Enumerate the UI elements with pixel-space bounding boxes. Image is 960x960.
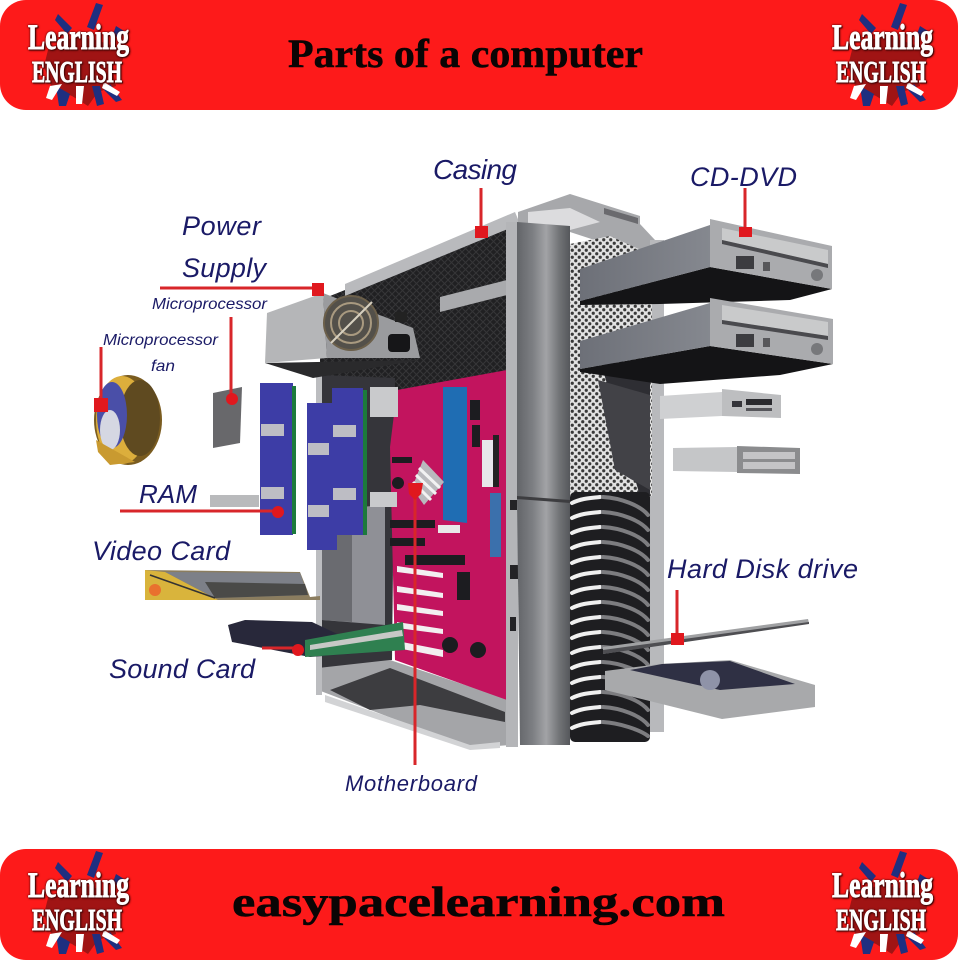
label: fan: fan <box>151 358 175 375</box>
interior drive bay wall <box>322 375 395 670</box>
floppy bay <box>673 446 800 474</box>
logo: bottom right <box>832 851 933 954</box>
motherboard <box>390 370 507 700</box>
sound card <box>228 620 405 657</box>
microprocessor fan <box>94 375 162 465</box>
casing top rail <box>345 212 520 296</box>
logo: top right <box>832 3 933 106</box>
RAM module 1 <box>260 383 296 535</box>
microprocessor chip <box>213 387 242 448</box>
video card <box>145 570 320 600</box>
label: Supply: Supply <box>182 253 268 283</box>
label: Video Card: Video Card <box>92 536 231 566</box>
mesh panel <box>570 236 652 496</box>
front column <box>517 222 570 745</box>
label: Sound Card: Sound Card <box>109 654 256 684</box>
card reader bay <box>660 389 781 419</box>
logo: bottom left: ENGLISH <box>32 902 122 937</box>
psu fan grill <box>324 296 378 350</box>
case left frame bottom <box>318 660 510 748</box>
header banner <box>0 0 958 110</box>
drive connectors <box>370 387 398 507</box>
label: Motherboard: Motherboard <box>345 771 478 796</box>
leader: power supply <box>160 283 324 296</box>
CPU heatsink <box>412 460 444 505</box>
title: Parts of a computer <box>288 31 643 76</box>
I/O connectors on frame <box>510 500 518 631</box>
tower interior dark back <box>320 226 510 668</box>
footer website: easypacelearning.com <box>232 880 725 926</box>
label: Hard Disk drive: Hard Disk drive <box>667 554 858 584</box>
logo: top left: ENGLISH <box>32 54 122 89</box>
label: Casing: Casing <box>433 154 517 185</box>
chips <box>390 400 486 658</box>
leader: microprocessor fan <box>94 347 108 412</box>
blue port <box>490 493 501 557</box>
hard disk drive <box>603 619 815 719</box>
silver side strip <box>650 240 664 732</box>
cooling fins <box>570 492 650 742</box>
logo: top left <box>28 3 129 106</box>
connector strip <box>482 440 493 487</box>
label: RAM: RAM <box>139 479 197 509</box>
frame bar beside motherboard <box>506 222 518 747</box>
label: Microprocessor fan: Microprocessor <box>103 332 219 349</box>
CD-DVD drive 1 <box>580 219 832 305</box>
PCI slots <box>397 566 443 657</box>
leader: CD-DVD <box>739 188 752 237</box>
footer banner <box>0 849 958 960</box>
leader: sound card <box>262 644 304 656</box>
hdd top cover <box>603 619 809 654</box>
power supply <box>265 293 420 378</box>
logo: bottom left <box>28 851 129 954</box>
label: Power Supply: Power <box>182 211 262 241</box>
label: CD-DVD: CD-DVD <box>690 162 797 192</box>
leader: RAM <box>120 506 284 518</box>
leader: casing <box>475 188 488 238</box>
leader: motherboard <box>408 483 423 765</box>
hdd body <box>605 660 815 719</box>
label: Microprocessor: Microprocessor <box>152 296 268 313</box>
leader: microprocessor <box>226 317 238 405</box>
logo: bottom left: Learning <box>28 865 129 905</box>
RAM strip connector <box>210 495 259 507</box>
RAM module 2 and 3 <box>307 388 367 550</box>
logo: top left: Learning <box>28 17 129 57</box>
CD-DVD drive 2 <box>580 298 833 384</box>
tower cap <box>518 194 655 258</box>
computer tower <box>316 194 664 750</box>
memory slot blue <box>443 387 467 523</box>
leader: hard disk drive <box>671 590 684 645</box>
